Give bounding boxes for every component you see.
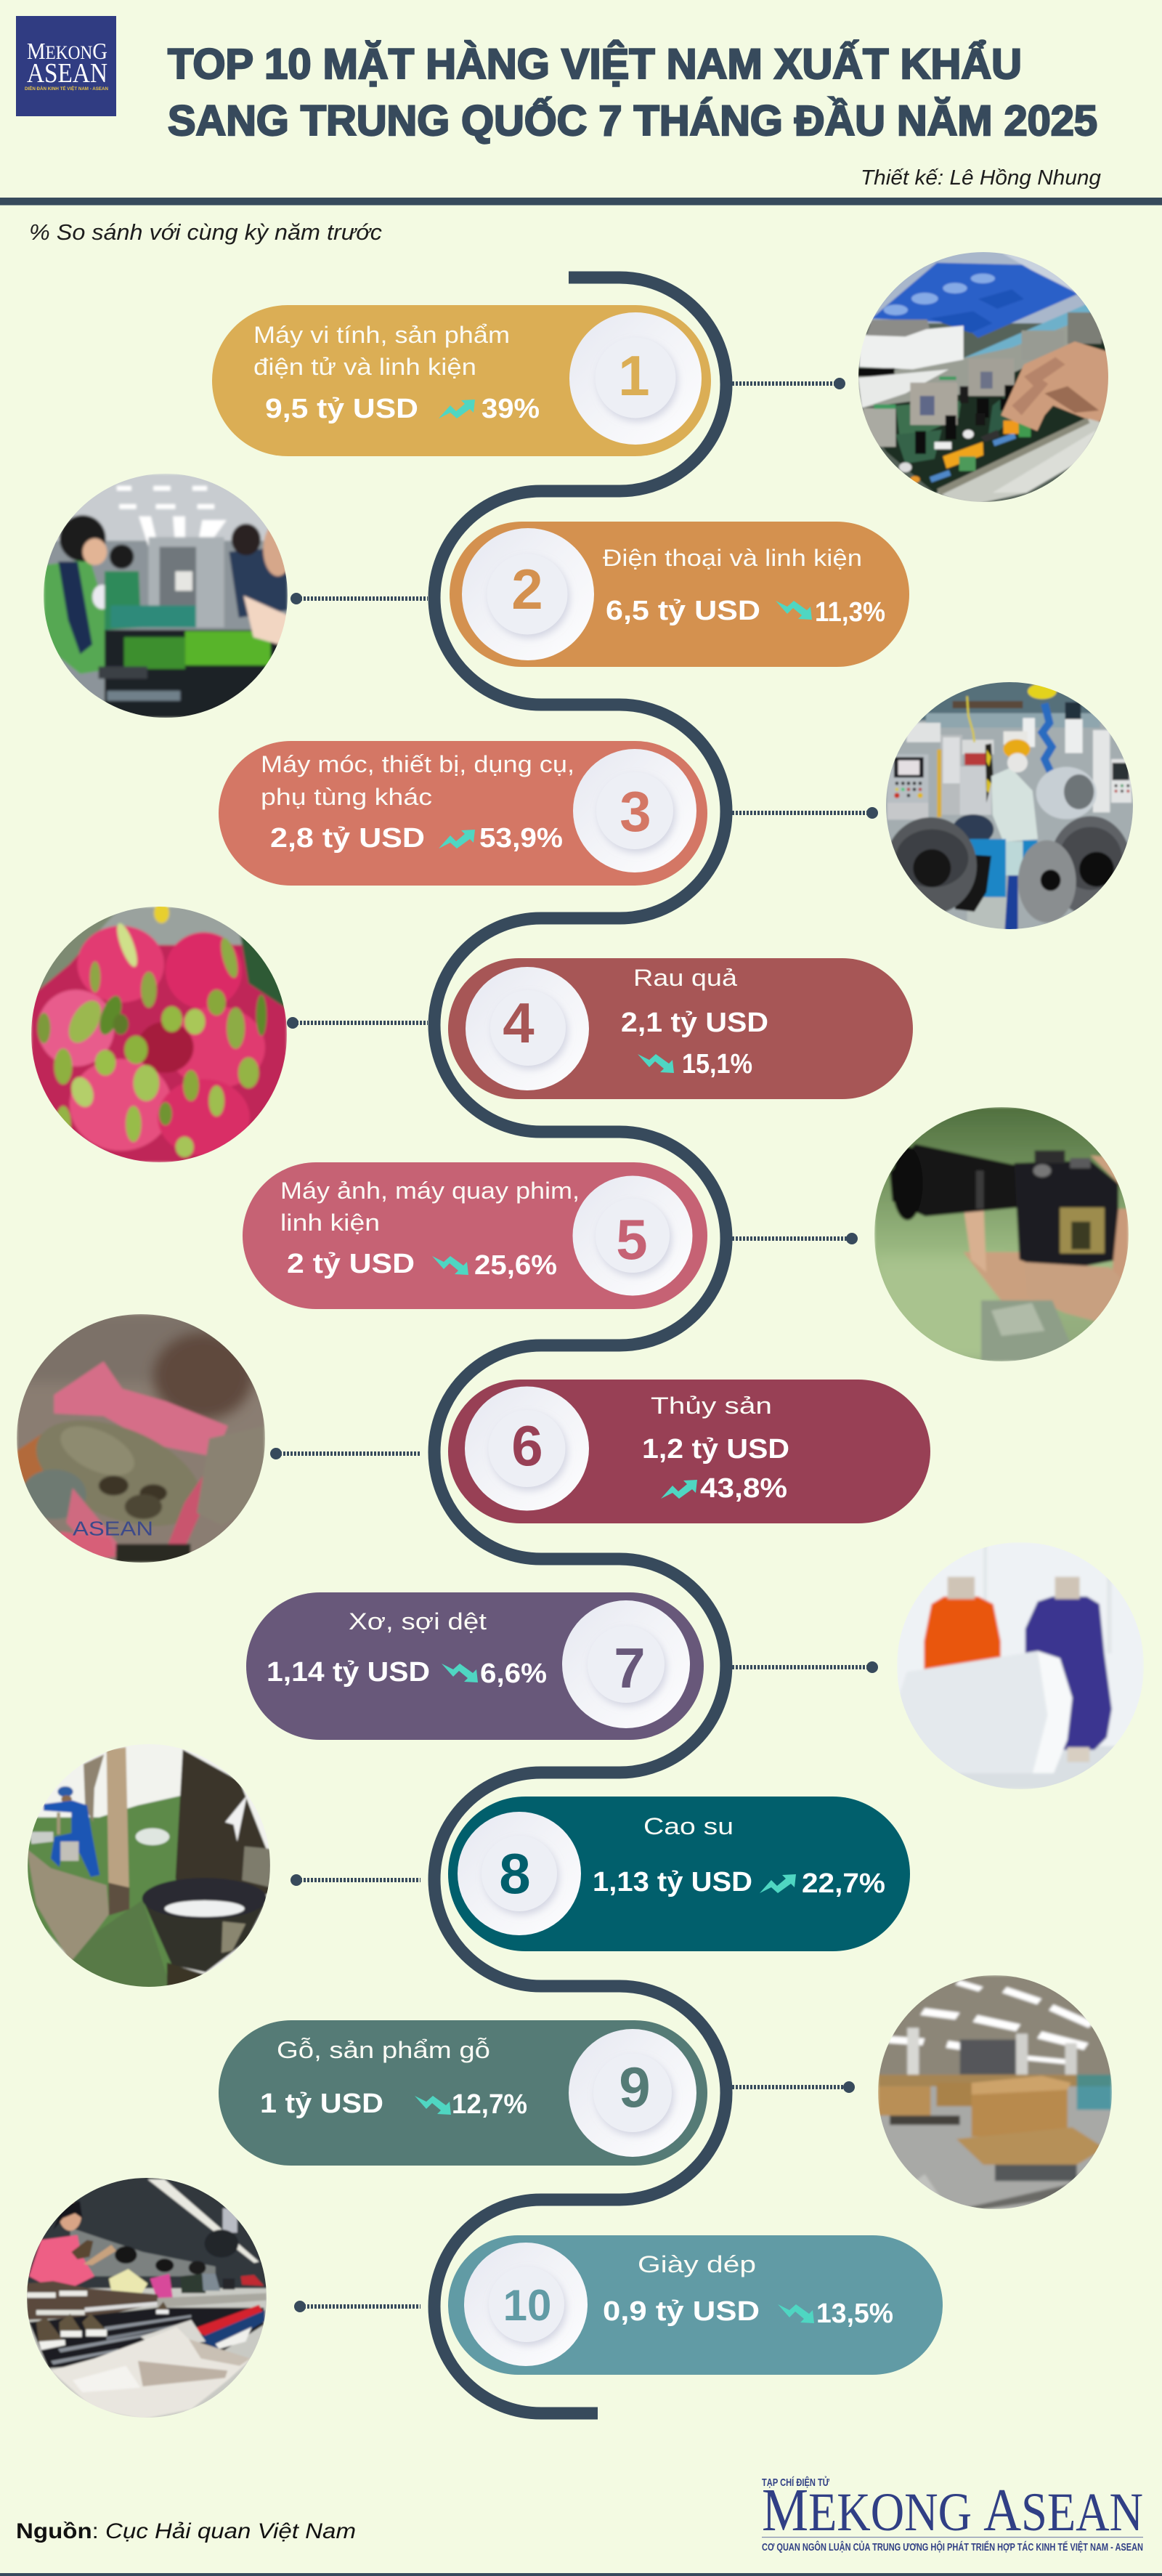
value 9: 1 tỷ USD — [260, 2089, 383, 2119]
connector 4 — [287, 1017, 428, 1029]
name 1: Máy vi tính, sản phẩm — [253, 322, 510, 348]
number badge 4 — [466, 967, 589, 1090]
connector 8 — [290, 1874, 420, 1886]
item 6 — [448, 1380, 930, 1523]
value 8: 1,13 tỷ USD — [593, 1867, 752, 1897]
pill 7 — [246, 1592, 704, 1740]
value 5: 2 tỷ USD — [287, 1249, 415, 1279]
pill 5 — [243, 1162, 707, 1309]
number badge 1: 1 — [618, 344, 650, 408]
number badge 8: 8 — [499, 1842, 531, 1905]
photo 4: dragon fruit — [31, 903, 287, 1162]
logo: Mekong Asean badge — [16, 16, 116, 116]
value 4: 2,1 tỷ USD — [621, 1008, 768, 1038]
logo: Mekong Asean badge: MEKONG — [27, 38, 107, 64]
number badge 1 — [569, 312, 702, 445]
name 3: Máy móc, thiết bị, dụng cụ, — [261, 751, 574, 777]
arrow up 1 — [439, 400, 475, 418]
pill 10 — [448, 2235, 943, 2375]
photo 8: rubber tapping — [22, 1740, 276, 1994]
logo: Mekong Asean wordmark: TẠP CHÍ ĐIỆN TỬ — [762, 2476, 829, 2489]
number badge 6 — [465, 1386, 589, 1511]
number badge 4: 4 — [503, 991, 535, 1055]
change 8: 22,7% — [802, 1868, 885, 1899]
number badge 3: 3 — [619, 779, 651, 843]
connector 1 — [732, 378, 845, 389]
number badge 3 — [573, 749, 696, 872]
winding timeline path — [434, 278, 726, 2413]
name 6: Thủy sản — [651, 1393, 772, 1419]
name 7: Xơ, sợi dệt — [349, 1608, 487, 1635]
value 6: 1,2 tỷ USD — [642, 1434, 789, 1465]
connector 6 — [270, 1448, 420, 1459]
value 10: 0,9 tỷ USD — [603, 2296, 760, 2327]
change 10: 13,5% — [816, 2298, 893, 2329]
change 5: 25,6% — [474, 1250, 557, 1281]
photo 5: camera in hands — [874, 1107, 1129, 1361]
number badge 7: 7 — [614, 1636, 646, 1700]
item 7 — [246, 1592, 704, 1740]
number badge 10 — [464, 2243, 588, 2366]
title — [168, 41, 1097, 145]
name 3 — [261, 751, 574, 810]
pill 2 — [450, 522, 909, 667]
change 2: 11,3% — [815, 597, 885, 628]
logo: Mekong Asean wordmark: MEKONG ASEAN — [762, 2476, 1143, 2544]
photo 10: shoe factory — [27, 2178, 267, 2418]
name 8: Cao su — [643, 1813, 734, 1839]
arrow down 4 — [638, 1054, 674, 1073]
number badge 9: 9 — [619, 2055, 651, 2119]
connector 5 — [732, 1233, 858, 1244]
name 2: Điện thoại và linh kiện — [603, 545, 862, 571]
connector 9 — [732, 2081, 855, 2093]
name 10: Giày dép — [638, 2251, 756, 2277]
name 3: phụ tùng khác — [261, 784, 432, 810]
logo: Mekong Asean badge: ASEAN — [27, 58, 107, 89]
photo 3: machinery factory — [882, 679, 1137, 933]
number badge 7 — [562, 1600, 690, 1728]
arrow up 6 — [661, 1480, 697, 1499]
pill 4 — [448, 958, 913, 1099]
photo 1: electronics assembly — [857, 251, 1111, 505]
number badge 5 — [572, 1175, 693, 1296]
number badge 2 — [462, 528, 594, 660]
pill 1 — [212, 305, 711, 456]
name 1: điện tử và linh kiện — [253, 354, 476, 380]
pill 3 — [219, 741, 707, 886]
item 10 — [448, 2235, 943, 2375]
change 6: 43,8% — [700, 1473, 787, 1504]
pill 8 — [448, 1797, 910, 1951]
item 8 — [448, 1797, 910, 1951]
item 1 — [212, 305, 711, 456]
source note: Nguồn : Cục Hải quan Việt Nam — [16, 2519, 356, 2543]
photo 6: crab — [17, 1314, 265, 1563]
number badge 9 — [569, 2029, 696, 2157]
note: percent comparison: % So sánh với cùng kỳ năm trước — [29, 219, 383, 245]
pill 9 — [219, 2020, 707, 2166]
item 5 — [243, 1162, 707, 1309]
number badge 10: 10 — [503, 2281, 551, 2330]
arrow up 8 — [760, 1874, 796, 1893]
change 7: 6,6% — [480, 1658, 547, 1689]
title: TOP 10 MẶT HÀNG VIỆT NAM XUẤT KHẨU — [168, 41, 1022, 88]
number badge 2: 2 — [511, 557, 543, 621]
name 5 — [280, 1178, 580, 1236]
change 3: 53,9% — [479, 823, 563, 854]
pill 6 — [448, 1380, 930, 1523]
arrow down 2 — [776, 601, 812, 620]
connector 2 — [290, 593, 428, 604]
arrow down 5 — [432, 1256, 468, 1275]
connector 10 — [294, 2301, 420, 2312]
name 1 — [253, 322, 510, 380]
item 9 — [219, 2020, 707, 2166]
name 5: Máy ảnh, máy quay phim, — [280, 1178, 580, 1204]
connector 3 — [732, 807, 878, 819]
change 9: 12,7% — [452, 2089, 527, 2120]
number badge 5: 5 — [616, 1207, 648, 1271]
arrow down 7 — [442, 1664, 478, 1682]
number badge 8 — [458, 1812, 581, 1935]
change 1: 39% — [482, 394, 540, 424]
change 4: 15,1% — [682, 1049, 752, 1080]
designer credit: Thiết kế: Lê Hồng Nhung — [861, 166, 1101, 190]
photo 6: crab: ASEAN — [73, 1517, 153, 1539]
connector 7 — [732, 1661, 878, 1673]
photo 7: yarn cones — [897, 1542, 1144, 1789]
number badge 6: 6 — [511, 1414, 543, 1478]
name 4: Rau quả — [633, 965, 737, 991]
value 3: 2,8 tỷ USD — [270, 823, 425, 854]
title: SANG TRUNG QUỐC 7 THÁNG ĐẦU NĂM 2025 — [168, 97, 1097, 145]
value 2: 6,5 tỷ USD — [606, 596, 760, 626]
photo 9: wood furniture factory — [878, 1975, 1112, 2209]
name 9: Gỗ, sản phẩm gỗ — [277, 2037, 490, 2063]
arrow down 10 — [778, 2304, 814, 2323]
photo 2: phone factory workers — [44, 474, 288, 718]
value 1: 9,5 tỷ USD — [265, 394, 418, 424]
value 7: 1,14 tỷ USD — [267, 1657, 430, 1688]
item 2 — [450, 522, 909, 667]
item 3 — [219, 741, 707, 886]
item 4 — [448, 958, 913, 1099]
arrow down 9 — [415, 2096, 451, 2115]
logo: Mekong Asean badge: DIỄN ĐÀN KINH TẾ VIỆT NAM - ASEAN — [25, 84, 108, 92]
name 5: linh kiện — [280, 1210, 380, 1236]
arrow up 3 — [439, 830, 475, 848]
